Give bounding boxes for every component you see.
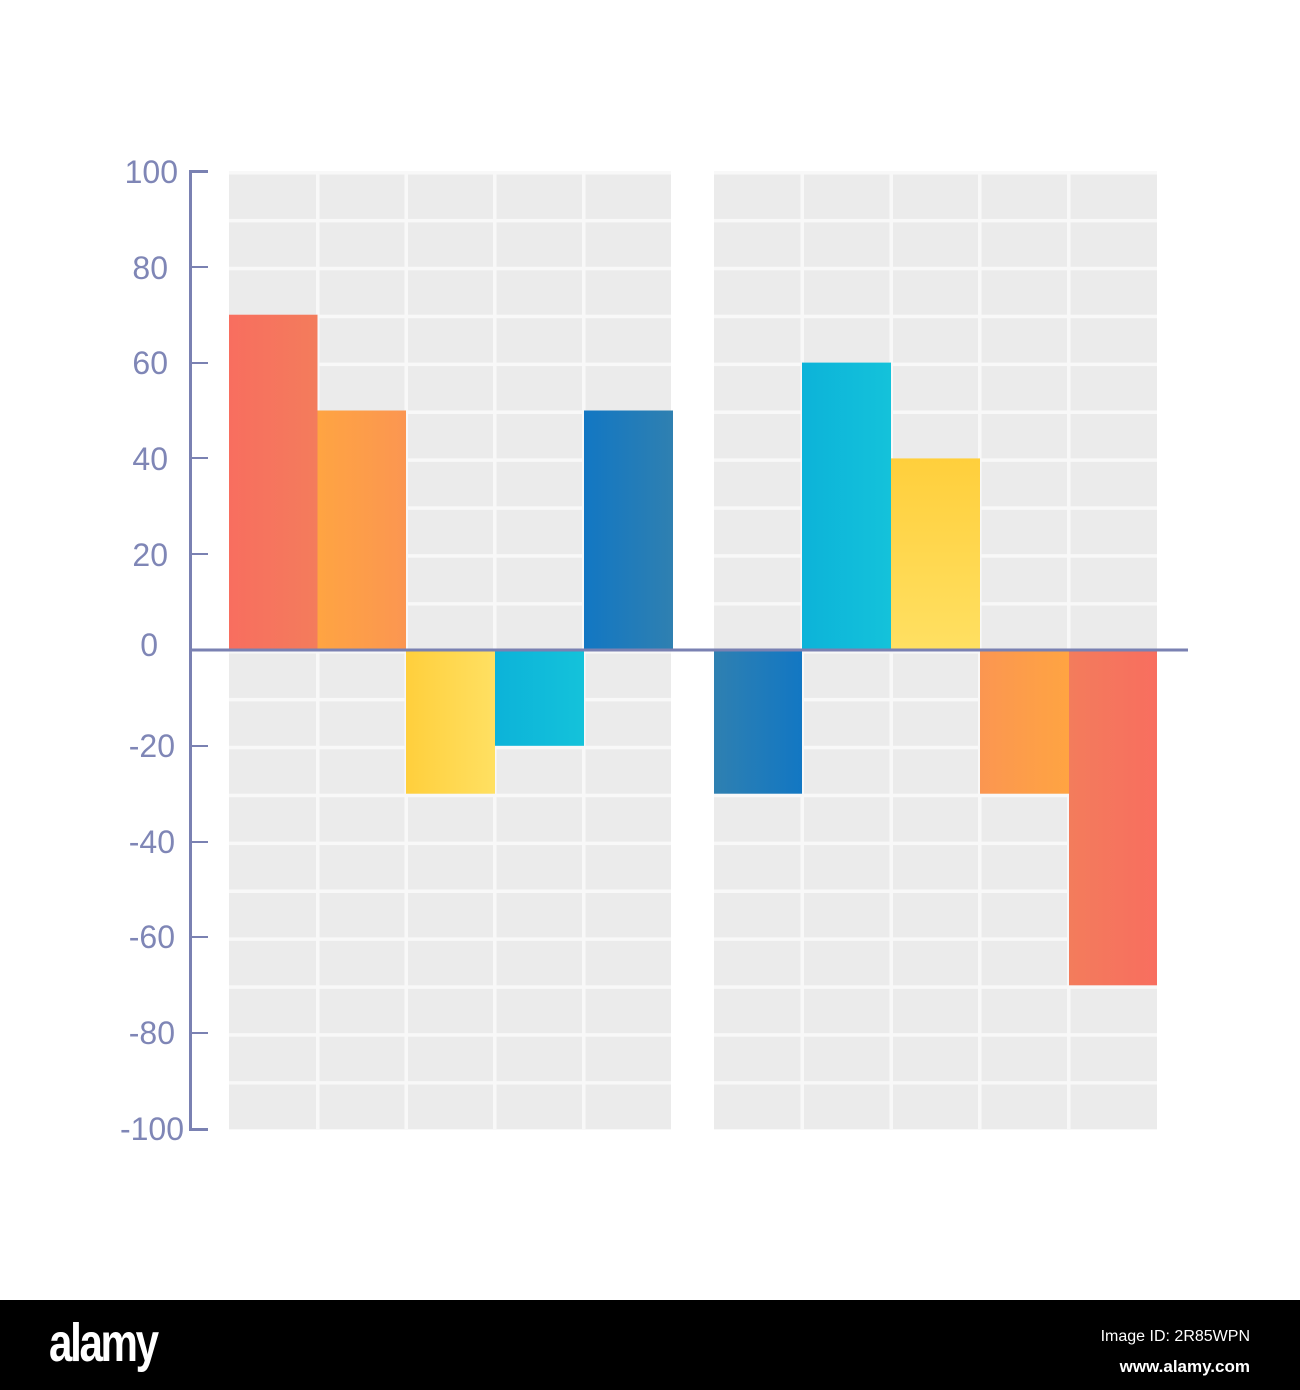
zero line <box>190 648 1188 652</box>
y axis labels: -40 <box>129 824 175 860</box>
y axis labels: 100 <box>125 154 178 190</box>
y axis labels: 0 <box>140 627 158 663</box>
panel: left grid <box>229 171 671 1130</box>
y axis labels: 60 <box>132 345 168 381</box>
footer <box>0 1300 1300 1390</box>
y axis labels: 40 <box>132 441 168 477</box>
footer text: Image ID: 2R85WPN <box>1101 1328 1250 1345</box>
footer text: www.alamy.com <box>1120 1357 1250 1376</box>
y axis labels: 20 <box>132 537 168 573</box>
y axis labels: -80 <box>129 1015 175 1051</box>
y axis labels: 80 <box>132 250 168 286</box>
y axis labels: -60 <box>129 919 175 955</box>
y axis labels: -100 <box>120 1111 184 1147</box>
bars: right group <box>714 363 1157 985</box>
footer text <box>1101 1328 1250 1376</box>
y axis <box>189 170 208 1131</box>
footer logo: alamy <box>49 1313 157 1373</box>
panel: right grid <box>714 171 1157 1130</box>
bars: left group <box>229 315 673 794</box>
y axis labels: -20 <box>129 728 175 764</box>
y axis labels <box>120 154 184 1147</box>
